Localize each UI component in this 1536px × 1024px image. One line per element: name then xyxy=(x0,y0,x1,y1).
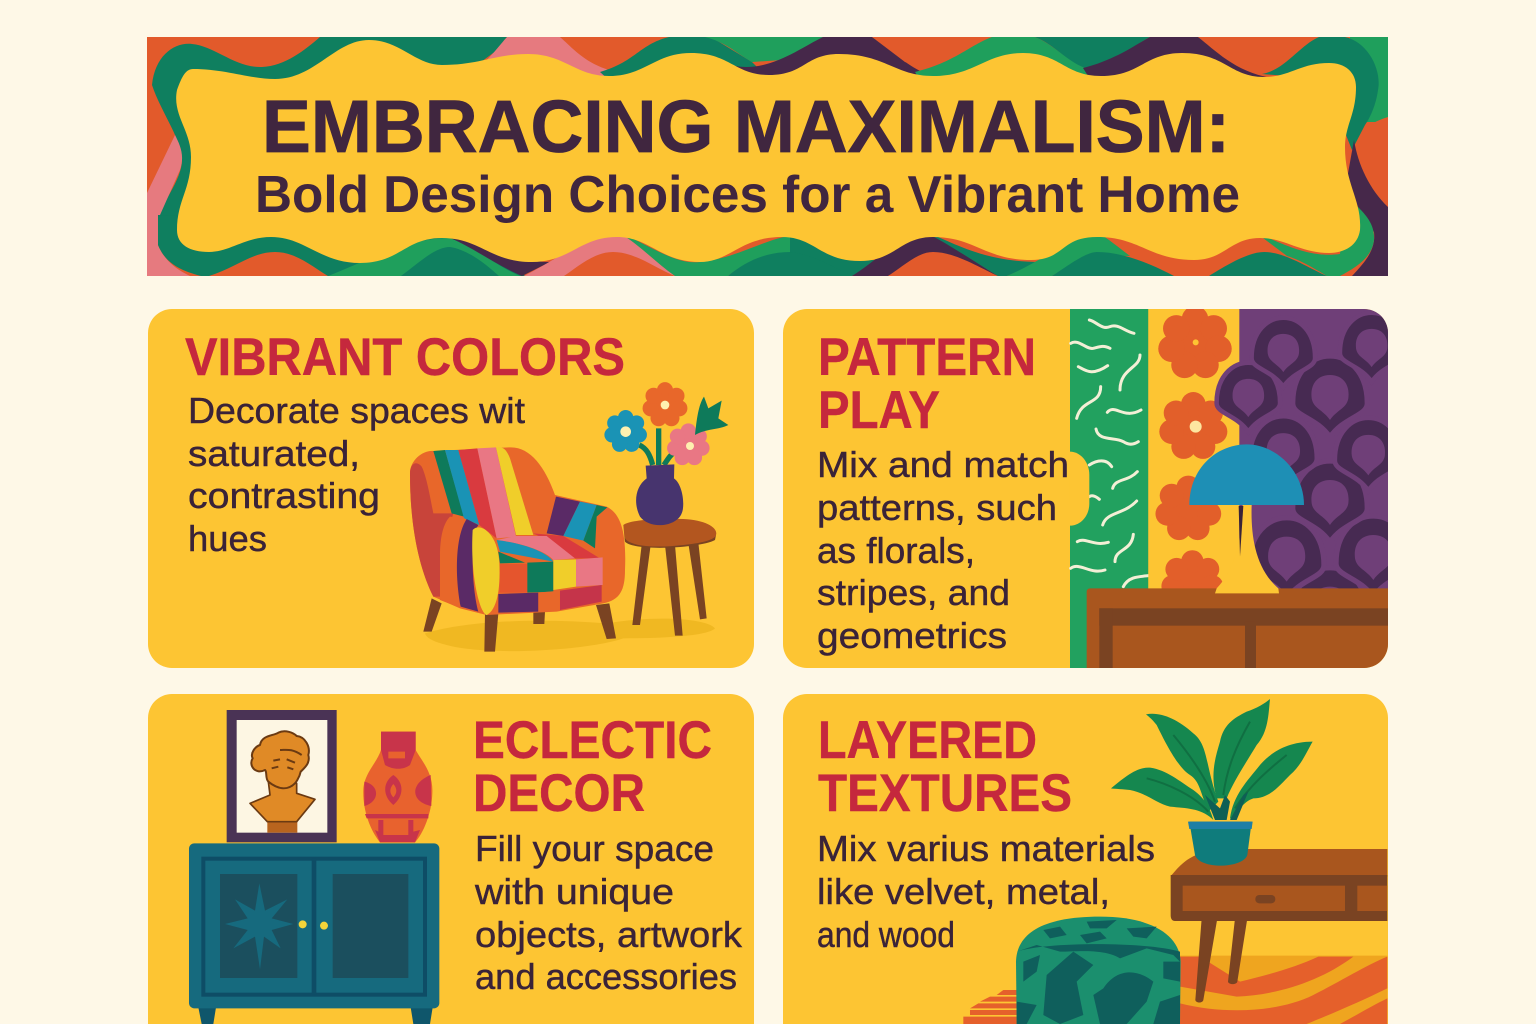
text block: pattern play: patterns, such xyxy=(817,487,1057,528)
text block: eclectic decor xyxy=(474,828,743,997)
potted plant xyxy=(1111,699,1313,866)
floral wallpaper xyxy=(1148,309,1232,588)
heading: pattern play xyxy=(818,328,1036,440)
text block: pattern play: Mix and match xyxy=(817,444,1069,485)
text block: vibrant colors: saturated, xyxy=(188,433,360,474)
framed bust xyxy=(227,710,337,842)
panel: vibrant colors xyxy=(148,309,754,668)
text block: layered textures: Mix varius materials xyxy=(817,828,1155,869)
panel: layered textures xyxy=(783,694,1388,1024)
text block: eclectic decor: Fill your space xyxy=(475,828,714,869)
text block: vibrant colors: hues xyxy=(188,518,267,559)
heading: layered textures xyxy=(818,711,1072,823)
console table xyxy=(1171,849,1387,1002)
text block: vibrant colors: Decorate spaces wit xyxy=(188,390,525,431)
heading: pattern play: PLAY xyxy=(818,381,940,440)
title: Bold Design Choices for a Vibrant Home xyxy=(255,166,1240,224)
title xyxy=(255,85,1240,224)
icon: framed bust, vase and cabinet xyxy=(189,710,439,1024)
banner: wavy multicolour title frame xyxy=(147,37,1388,276)
heading: layered textures: TEXTURES xyxy=(818,764,1072,823)
red patterned vase xyxy=(363,732,432,842)
text block: pattern play: as florals, xyxy=(817,530,975,571)
heading: pattern play: PATTERN xyxy=(818,328,1036,387)
banner: yellow title plaque xyxy=(176,40,1360,263)
text block: eclectic decor: objects, artwork xyxy=(475,914,743,955)
title: EMBRACING MAXIMALISM: xyxy=(262,85,1230,168)
text block: layered textures: like velvet, metal, xyxy=(817,871,1110,912)
panel: pattern play xyxy=(783,305,1411,675)
text block: pattern play xyxy=(817,444,1069,656)
illustration: wallpaper stripes, lamp and sideboard xyxy=(1070,305,1411,675)
heading: eclectic decor: ECLECTIC xyxy=(473,711,712,770)
green squiggle wallpaper xyxy=(1070,305,1148,672)
text block: layered textures xyxy=(817,828,1155,955)
panel: eclectic decor xyxy=(148,694,754,1024)
text block: pattern play: stripes, and xyxy=(817,572,1010,613)
purple scallop wallpaper xyxy=(1214,309,1388,588)
heading: layered textures: LAYERED xyxy=(818,711,1037,770)
icon: plant, console table, pouf and rug xyxy=(963,699,1387,1024)
text block: eclectic decor: with unique xyxy=(474,871,674,912)
heading: eclectic decor xyxy=(473,711,712,823)
heading: vibrant colors: VIBRANT COLORS xyxy=(185,328,625,387)
text block: layered textures: and wood xyxy=(817,914,955,955)
text block: pattern play: geometrics xyxy=(817,615,1007,656)
table lamp xyxy=(1189,444,1304,593)
text block: eclectic decor: and accessories xyxy=(475,956,737,997)
heading: eclectic decor: DECOR xyxy=(473,764,645,823)
icon: armchair, side table and flower vase xyxy=(410,382,728,652)
striped rug xyxy=(963,956,1387,1024)
text block: vibrant colors: contrasting xyxy=(188,475,380,516)
teal cabinet xyxy=(189,843,439,1024)
text block: vibrant colors xyxy=(188,390,525,559)
sideboard xyxy=(1086,588,1388,668)
velvet pouf xyxy=(1016,917,1181,1024)
